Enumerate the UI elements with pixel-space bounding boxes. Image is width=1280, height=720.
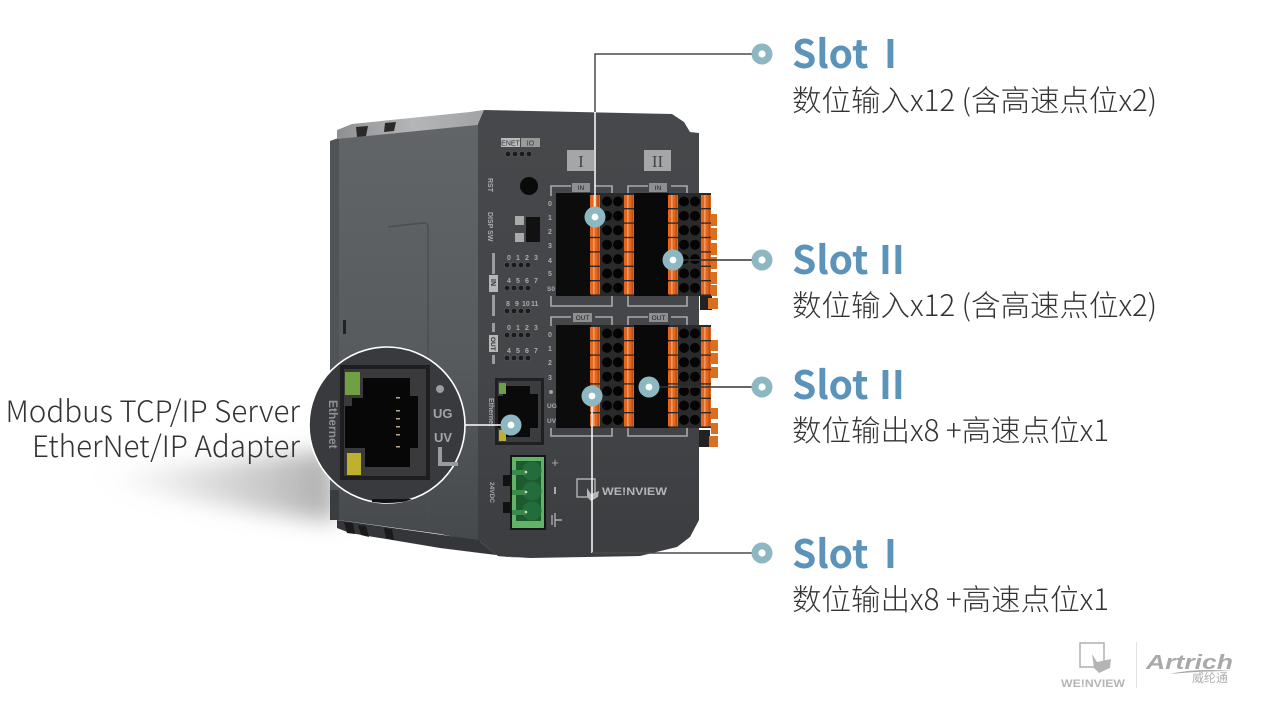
callout: slot I input: 数位输入x12 (含高速点位x2) [792, 78, 1157, 120]
logo: weinview [1061, 643, 1126, 690]
callout: slot I output: 数位输出x8 +高速点位x1 [792, 577, 1109, 619]
status labels left column: 1 [516, 325, 520, 332]
callout: slot II input: Slot [792, 230, 868, 286]
leader lines [465, 54, 762, 553]
callout: slot II output [752, 355, 1109, 450]
led yellow [347, 453, 361, 475]
power terminal: 24VDC [488, 482, 495, 503]
status labels left column: 3 [534, 255, 538, 262]
terminal label tags [572, 183, 668, 322]
row numbers: 2 [548, 360, 552, 367]
status labels left column: 5 [516, 348, 520, 355]
status labels left column: OUT [489, 337, 496, 351]
terminal label tags: OUT [576, 315, 589, 322]
terminal brackets [551, 186, 687, 436]
row numbers: S0 [547, 286, 555, 293]
logo: artrich: Artrich [1145, 652, 1233, 674]
status labels left column: 8 [506, 301, 510, 308]
slot header labels: II [652, 152, 663, 171]
status labels left column: 4 [507, 348, 511, 355]
row numbers: UV [547, 418, 557, 425]
connector pins [396, 397, 400, 448]
logo: artrich [1136, 642, 1233, 688]
status labels left column: ENET [501, 140, 521, 148]
status labels left column: 6 [525, 348, 529, 355]
led green [345, 372, 360, 395]
status labels left column: 4 [507, 278, 511, 285]
logo: artrich: 威纶通 [1192, 669, 1228, 686]
callout: slot I input: Slot [792, 24, 868, 80]
status labels left column: 11 [531, 301, 539, 308]
status labels left column: 9 [515, 301, 519, 308]
terminal label tags: OUT [652, 315, 665, 322]
front panel [478, 110, 699, 558]
status labels left column: IO [527, 140, 535, 148]
power terminal: + [551, 455, 559, 470]
row numbers: 4 [548, 258, 552, 265]
status labels left column: IN [489, 279, 496, 286]
status labels left column: 0 [507, 325, 511, 332]
callout: slot I input: I [884, 24, 897, 80]
status labels left column: 2 [525, 255, 529, 262]
status labels left column: 2 [525, 325, 529, 332]
row numbers: 0 [548, 201, 552, 208]
status labels left column: 0 [507, 255, 511, 262]
callout: slot II input: II [879, 230, 905, 286]
callout: slot I output [752, 524, 1109, 619]
callout: slot II output: Slot [792, 355, 868, 411]
device logo: WE!NVIEW [602, 486, 668, 498]
callout: slot I output: Slot [792, 524, 868, 580]
logo: weinview: WE!NVIEW [1061, 678, 1126, 690]
magnified ethernet callout [309, 347, 465, 503]
status labels left column: 7 [534, 278, 538, 285]
callout: ethernet protocols [5, 388, 300, 466]
terminal block: outputs [556, 325, 718, 447]
callout: slot I output: I [884, 524, 897, 580]
row numbers: 0 [548, 332, 552, 339]
callout: slot I input [752, 24, 1157, 120]
terminal label tags: IN [578, 185, 585, 192]
side panel [330, 110, 520, 558]
row numbers: 3 [548, 243, 552, 250]
terminal label tags: IN [655, 185, 662, 192]
status labels left column: 1 [516, 255, 520, 262]
row numbers: UG [547, 403, 557, 410]
callout: slot II input [752, 230, 1157, 325]
device: controller module [330, 110, 718, 558]
callout: slot II output: 数位输出x8 +高速点位x1 [792, 408, 1109, 450]
status labels left column: 6 [525, 278, 529, 285]
slot header labels [567, 150, 671, 171]
magnified ethernet callout: UV [434, 430, 452, 445]
magnified ethernet callout: Ethernet [326, 400, 340, 449]
status labels left column: DISP SW [486, 212, 493, 242]
row numbers: 1 [548, 346, 552, 353]
callout: ethernet protocols: Modbus TCP/IP Server [5, 388, 300, 431]
magnified ethernet callout: UG [433, 406, 452, 421]
row numbers: 1 [548, 215, 552, 222]
status labels left column: 3 [534, 325, 538, 332]
callout: slot II output: II [879, 355, 905, 411]
terminal block: inputs [556, 193, 718, 310]
slot header labels: I [578, 152, 584, 171]
ethernet port: Ethernet [487, 398, 494, 427]
row numbers: 3 [548, 375, 552, 382]
row numbers: 2 [548, 229, 552, 236]
row numbers: 5 [548, 271, 552, 278]
status labels left column: RST [486, 178, 493, 193]
callout: ethernet protocols: EtherNet/IP Adapter [32, 423, 300, 466]
power terminal [488, 455, 562, 530]
row numbers [547, 201, 557, 425]
status labels left column [486, 138, 540, 364]
device markers [500, 206, 684, 436]
callout: slot II input: 数位输入x12 (含高速点位x2) [792, 283, 1157, 325]
status labels left column: 5 [516, 278, 520, 285]
device logo [577, 479, 668, 501]
floor shadow [95, 450, 335, 522]
ethernet port [487, 378, 544, 445]
status labels left column: 10 [522, 301, 530, 308]
status labels left column: 7 [534, 348, 538, 355]
